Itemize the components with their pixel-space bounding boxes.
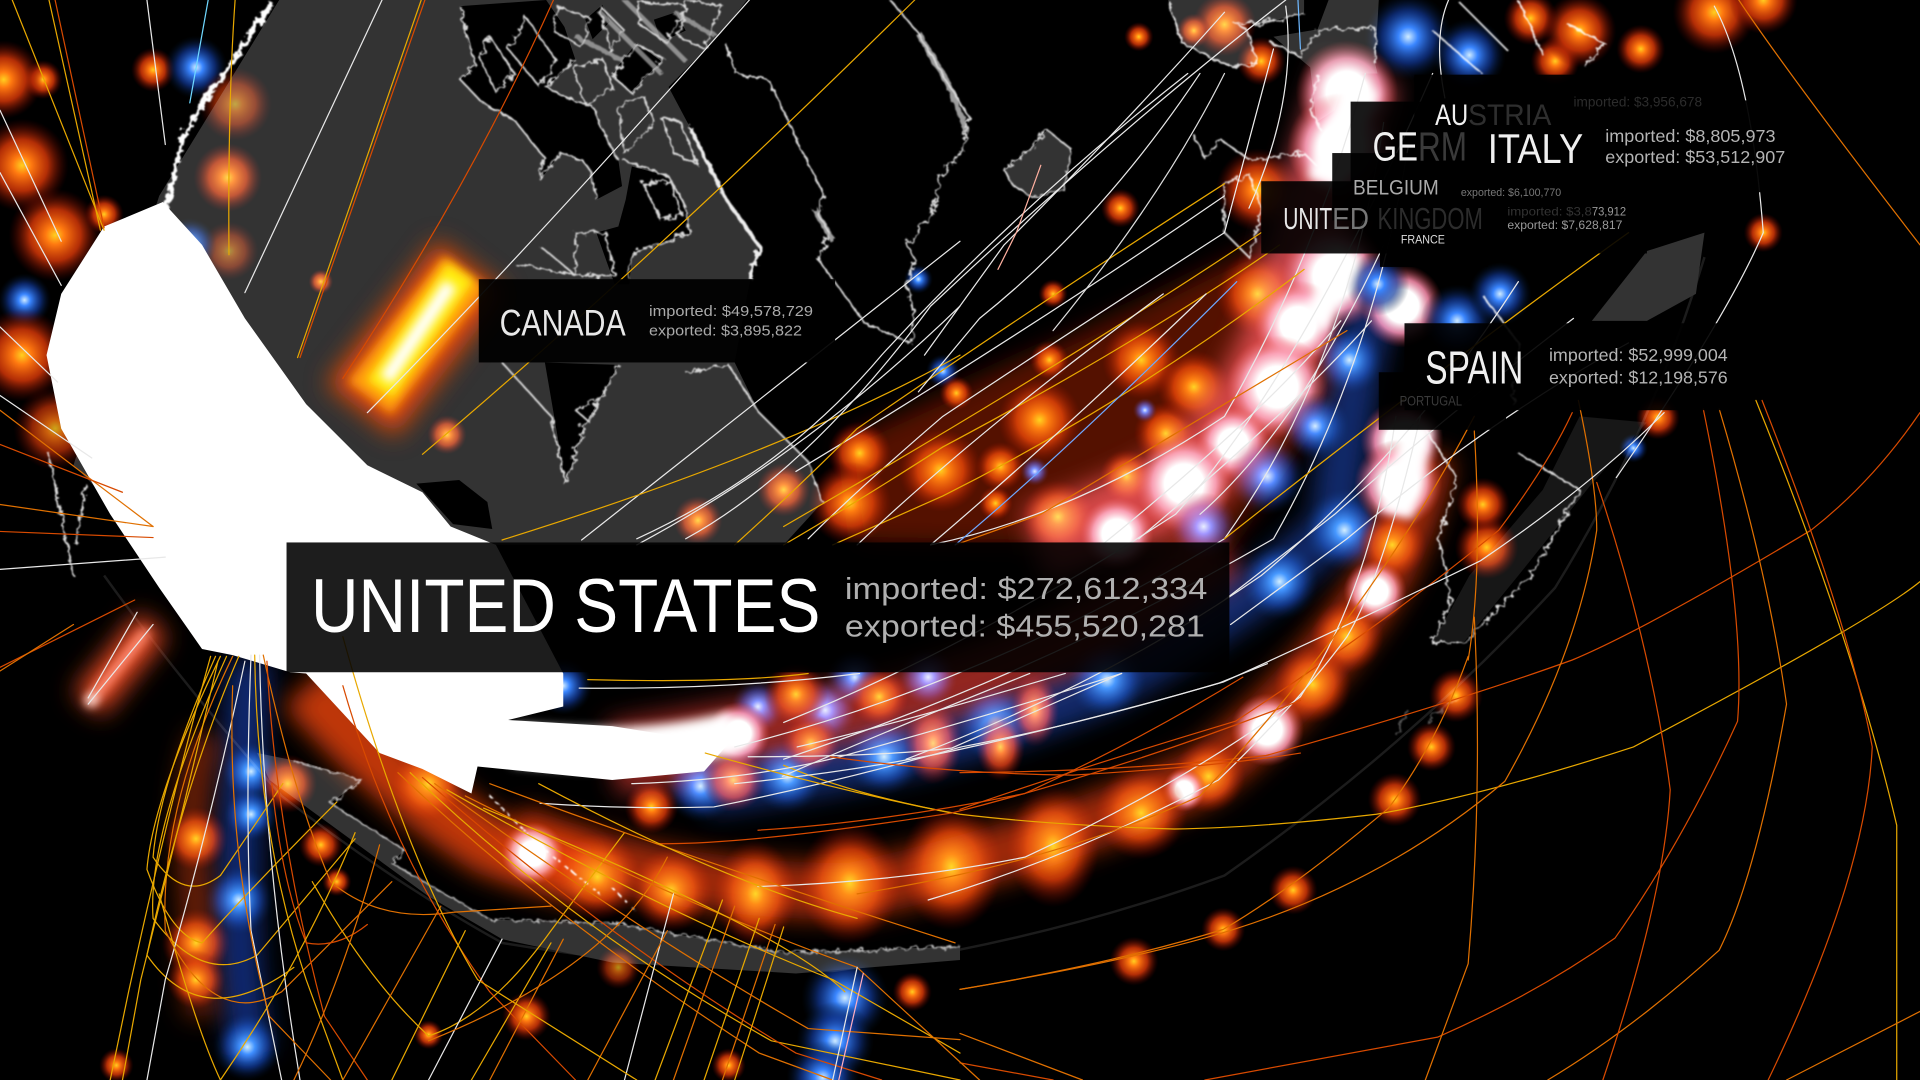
label: Austria: STRIA [1468, 99, 1552, 132]
label: France [1380, 208, 1488, 267]
label: United States: exported: $455,520,281 [845, 610, 1205, 644]
label: Spain: imported: $52,999,004 [1549, 345, 1728, 365]
label: United Kingdom: UNIT [1283, 202, 1332, 236]
label: Portugal: PORTUGAL [1400, 393, 1462, 408]
label: Belgium [1332, 153, 1592, 220]
glow streak: Pacific [88, 624, 153, 704]
Greenland bright coast sections [813, 33, 967, 240]
panel: Germany [1351, 102, 1718, 186]
land masses [73, 0, 1704, 973]
land: Iberia and Africa [1433, 416, 1647, 643]
band: left fan [239, 661, 251, 1053]
panel: Spain [1404, 323, 1745, 410]
land: Central and South America strip [257, 753, 960, 973]
label: United Kingdom: ED [1332, 202, 1369, 236]
panel: Austria [1414, 75, 1731, 148]
white saturated blob: North America trade hub [47, 202, 747, 793]
glow streak: Canada [361, 267, 471, 410]
panel: Belgium [1332, 153, 1592, 220]
panel: Portugal [1379, 372, 1506, 430]
label: Germany: RM [1418, 123, 1467, 169]
label: Italy: ITALY [1488, 125, 1583, 172]
land: continental Europe [1273, 0, 1379, 122]
panel: United Kingdom [1261, 181, 1647, 253]
land: Scandinavia [1168, 0, 1304, 66]
label: United States [287, 542, 1229, 672]
label: Canada: imported: $49,578,729 [649, 304, 813, 320]
label: Austria: imported: $3,956,678 [1573, 95, 1702, 110]
Alaska white coast [165, 2, 272, 214]
label: United States: imported: $272,612,334 [845, 572, 1207, 606]
bright white strip: North Sea [1325, 86, 1362, 184]
band: arcs south of label [612, 551, 1224, 759]
band: central orange [306, 686, 588, 876]
land: Iceland [1004, 130, 1071, 197]
Baffin bright coast [689, 126, 759, 279]
label: Belgium: exported: $6,100,770 [1461, 187, 1561, 199]
bright white strip: Bay of Biscay [1313, 251, 1347, 324]
globe hemisphere rim [104, 257, 1704, 971]
label: Belgium: BELGIUM [1353, 177, 1439, 200]
label: United Kingdom [1261, 181, 1647, 253]
label: United States: UNITED STATES [311, 564, 820, 649]
label: Spain: exported: $12,198,576 [1549, 367, 1728, 387]
land: North America [73, 0, 823, 576]
label: Portugal [1379, 372, 1506, 430]
South America coast [294, 762, 960, 953]
label: Canada: exported: $3,895,822 [649, 324, 802, 340]
heat bands [192, 73, 1427, 1053]
label: United Kingdom: imported: $3,8 [1507, 205, 1592, 219]
label: Italy: exported: $53,512,907 [1605, 147, 1785, 167]
panel: Italy [1467, 100, 1767, 192]
blob tail soft edge [514, 732, 735, 749]
label panels: stacked European labels [1261, 75, 1767, 430]
label: France: FRANCE [1401, 233, 1445, 247]
label: Canada [479, 279, 835, 362]
label: Spain [1404, 323, 1745, 410]
label: United Kingdom: exported: $7,628,817 [1507, 218, 1623, 232]
band: outer arc [514, 453, 1427, 891]
band: inner blue arcs [704, 306, 1371, 790]
Arctic channels and bays [416, 0, 689, 529]
label: United Kingdom: 73,912 [1592, 205, 1626, 219]
coastlines [49, 0, 1604, 912]
panel: France [1380, 208, 1488, 267]
label: Spain: SPAIN [1425, 341, 1523, 393]
label: Canada: CANADA [500, 303, 626, 344]
bright white strip: Spain arc [1396, 422, 1418, 514]
band: dark red Atlantic fill [845, 245, 1347, 551]
label: Italy [1467, 100, 1785, 192]
label: Germany: GE [1373, 123, 1418, 169]
band: lower-left orange [192, 735, 208, 1016]
label: Germany [1351, 102, 1718, 186]
Arctic archipelago mottling [576, 0, 716, 73]
label: Austria [1414, 75, 1731, 148]
land: eastern Europe [1592, 233, 1704, 321]
band: middle pink arcs [1035, 73, 1362, 545]
label: Italy: imported: $8,805,973 [1605, 126, 1776, 146]
label: United Kingdom: KINGDOM [1378, 202, 1483, 236]
label: Austria: AU [1435, 99, 1468, 132]
